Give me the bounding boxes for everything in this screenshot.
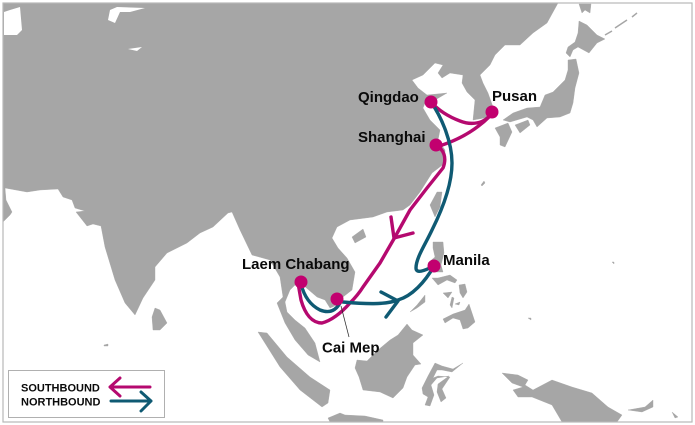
legend label: southbound: SOUTHBOUND	[21, 382, 100, 394]
port: Pusan	[486, 106, 498, 118]
lake: Caspian Sea	[4, 7, 22, 35]
land: Asian mainland	[3, 3, 558, 362]
land: Shikoku	[515, 120, 530, 133]
land: Sulawesi	[422, 363, 463, 406]
label: Qingdao: Qingdao	[358, 89, 419, 106]
inland lakes	[4, 7, 145, 51]
southbound route	[298, 102, 492, 323]
legend box	[8, 370, 164, 418]
land: New Guinea	[502, 373, 622, 422]
land: Taiwan	[430, 192, 442, 217]
port: Laem Chabang	[294, 276, 308, 288]
port: Qingdao	[424, 96, 438, 108]
northbound route	[301, 102, 452, 317]
arrowhead: southbound	[391, 217, 413, 238]
label: Manila: Manila	[443, 252, 490, 269]
label: Shanghai: Shanghai	[358, 129, 426, 146]
land: Bougainville	[672, 412, 678, 418]
lake: Aral and Balkhash	[108, 7, 145, 51]
port: Shanghai	[430, 138, 442, 152]
label: Cai Mep: Cai Mep	[322, 340, 380, 356]
port: Cai Mep	[330, 292, 344, 306]
port labels	[242, 88, 537, 356]
land: small islands	[104, 181, 614, 346]
land: Kuril islands	[605, 13, 637, 35]
land: Sri Lanka	[152, 308, 167, 330]
land: Hainan	[352, 229, 366, 243]
legend	[8, 370, 164, 418]
land: Hokkaido	[566, 21, 605, 57]
label: Pusan: Pusan	[492, 88, 537, 105]
land: Sumatra	[258, 332, 330, 407]
land: Kyushu	[495, 123, 512, 147]
legend arrow: northbound	[111, 392, 151, 411]
legend label: northbound: NORTHBOUND	[21, 396, 100, 408]
label: Laem Chabang: Laem Chabang	[242, 256, 350, 273]
land: Honshu	[503, 59, 579, 127]
land: Java	[328, 413, 383, 422]
port markers	[294, 96, 498, 306]
land: New Britain	[628, 400, 653, 412]
land: Sakhalin tip	[579, 4, 591, 13]
land: Borneo	[355, 324, 423, 398]
arrowhead: northbound	[381, 292, 398, 317]
land: Philippines	[410, 242, 475, 329]
Cai Mep leader line	[341, 306, 349, 337]
legend arrow: southbound	[110, 378, 150, 396]
port: Manila	[428, 260, 440, 272]
